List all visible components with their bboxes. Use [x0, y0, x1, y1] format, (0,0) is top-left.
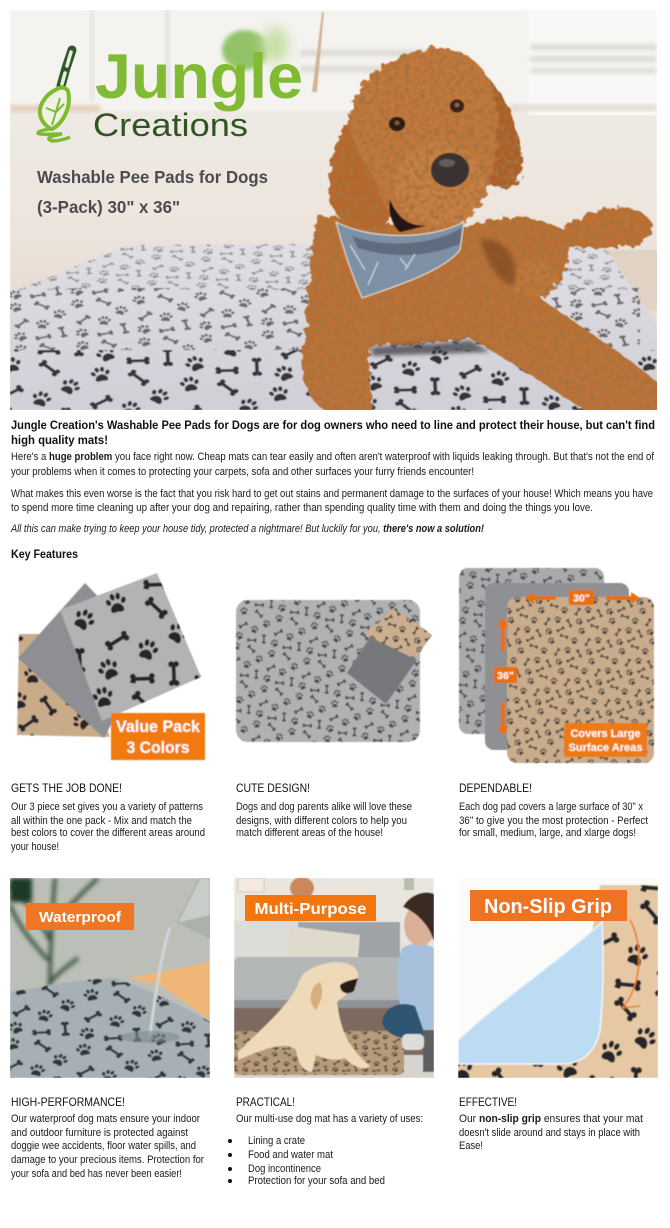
feature text: effective: doesn't slide around and stays in place with: [459, 1127, 640, 1139]
feature text: gets the job done: best colors to cover the different areas around: [11, 827, 205, 839]
orange badge: value pack: 3 Colors: [126, 738, 190, 757]
folded tan mat: [364, 607, 432, 659]
floor: [234, 1007, 424, 1056]
arrow: width: 30": [573, 592, 590, 604]
intro paragraph 2: [11, 488, 653, 514]
sofa seat: [234, 957, 409, 1003]
intro text block: [10, 418, 655, 535]
tan mat with pattern: [458, 885, 658, 1078]
near paw right: [507, 261, 557, 297]
orange label: waterproof: Waterproof: [39, 909, 122, 926]
dog mat: [234, 1031, 404, 1075]
folded gray mat: [347, 637, 417, 704]
tail: [560, 207, 652, 248]
arrow: width: [525, 590, 640, 605]
large gray mat: [236, 600, 420, 742]
hero title line 2: (3-Pack) 30" x 36": [37, 197, 180, 217]
orange label: waterproof: [26, 903, 134, 930]
panel: waterproof image: [10, 878, 210, 1078]
photo background room: [10, 10, 660, 410]
bullet list of uses: Protection for your sofa and bed: [248, 1175, 385, 1187]
head: [349, 48, 498, 232]
feature text: cute design: CUTE DESIGN!: [236, 781, 310, 795]
orange badge: value pack: [111, 713, 205, 760]
panel: non-slip image: [458, 878, 658, 1078]
bullet list of uses: [228, 1135, 385, 1187]
feature text: high-performance: [11, 1095, 204, 1180]
striped cushion: [286, 926, 360, 958]
arrow: height: [494, 617, 517, 736]
feature text: effective: Ease!: [459, 1140, 483, 1152]
feature text: high-performance: your sofa and bed has never been easier!: [11, 1168, 182, 1180]
feature text: gets the job done: Our 3 piece set gives you a variety of patterns: [11, 801, 203, 813]
bullet list of uses: Lining a crate: [248, 1135, 305, 1147]
feature text: effective: Our non-slip grip ensures that your mat: [459, 1113, 643, 1125]
panel: value pack image: [17, 573, 205, 760]
bullet list of uses: Food and water mat: [248, 1149, 333, 1161]
orange badge: covers large surface areas: Covers Large: [570, 728, 640, 740]
face: [389, 100, 469, 232]
back gray mat: [459, 568, 604, 734]
heading: Key Features: Key Features: [11, 547, 78, 561]
feature text: practical: Our multi-use dog mat has a variety of uses:: [236, 1113, 423, 1125]
labrador: [238, 962, 370, 1072]
glass: [178, 878, 210, 938]
tan mat: [17, 634, 110, 737]
orange label: non-slip grip: [470, 890, 627, 921]
feature text: high-performance: HIGH-PERFORMANCE!: [11, 1095, 125, 1109]
wordmark Creations: Creations: [93, 107, 248, 143]
bandana: [336, 222, 464, 298]
feature text: high-performance: damage to your precious items. Protection for: [11, 1154, 204, 1166]
wet mat: [10, 978, 210, 1078]
dark gray mat: [18, 583, 150, 738]
panel: hero photo: [10, 10, 670, 420]
feature text: cute design: designs, with different colors to help you: [236, 815, 407, 827]
wordmark Jungle: Jungle: [95, 42, 303, 112]
intro paragraph 1: [11, 451, 655, 478]
muzzle: [468, 198, 485, 218]
blue non-slip backing: [458, 922, 603, 1064]
feature text: effective: EFFECTIVE!: [459, 1095, 517, 1109]
orange label: multi-purpose: Multi-Purpose: [254, 901, 367, 918]
pee pad mat: [10, 244, 657, 410]
feature text: cute design: [236, 781, 412, 839]
feature text: gets the job done: GETS THE JOB DONE!: [11, 781, 122, 795]
feature text: effective: [459, 1095, 643, 1152]
intro paragraph 3: All this can make trying to keep your house tidy, protected a nightmare! But luckily for you, there's now a solution!: [10, 523, 484, 535]
feature text: dependable: [459, 781, 648, 839]
feature text: gets the job done: all within the one pack - Mix and match the: [11, 815, 192, 827]
feature text: high-performance: and outdoor furniture is protected against: [11, 1127, 188, 1139]
orange badge: covers large surface areas: [564, 723, 647, 757]
icon: bamboo and leaf: [38, 50, 72, 141]
feature text: cute design: match different areas of the house!: [236, 827, 383, 839]
front tan mat: [507, 597, 654, 763]
feature text: high-performance: doggie wee accidents, floor water spills, and: [11, 1140, 196, 1152]
bullet list of uses: Dog incontinence: [248, 1163, 321, 1175]
hero title line 1: Washable Pee Pads for Dogs: [37, 167, 268, 187]
feature text: practical: [228, 1095, 423, 1187]
intro paragraph 1: your problems when it comes to protecting your carpets, sofa and other surfaces your furry friends encounter!: [11, 466, 474, 478]
feature text: cute design: Dogs and dog parents alike will love these: [236, 801, 412, 813]
logo: Jungle Creations: [38, 42, 303, 143]
orange label: non-slip grip: Non-Slip Grip: [484, 896, 612, 918]
light gray patterned mat: [60, 573, 201, 721]
ears: [329, 105, 391, 230]
panel: multi-purpose image: [234, 877, 436, 1078]
panel: dependable image: [459, 568, 654, 763]
orange badge: value pack: Value Pack: [116, 717, 201, 736]
shadow under belly: [372, 340, 490, 356]
orange badge: covers large surface areas: Surface Areas: [568, 742, 642, 754]
feature text: dependable: DEPENDABLE!: [459, 781, 532, 795]
feature text: high-performance: Our waterproof dog mats ensure your indoor: [11, 1113, 200, 1125]
water pour: [150, 928, 170, 1035]
feature text: practical: PRACTICAL!: [236, 1095, 295, 1109]
arrow: height: 36": [497, 670, 514, 682]
orange label: multi-purpose: [245, 895, 376, 921]
intro paragraph 2: to spend more time cleaning up after your dog and repairing, rather than spending quality time with them and doing the things you love.: [11, 502, 593, 514]
feature text: gets the job done: [11, 781, 205, 853]
plant: [10, 878, 98, 985]
dog: [302, 48, 670, 420]
panel: cute design image: [236, 600, 432, 742]
dark gap between body and leg: [480, 239, 516, 285]
feature text: gets the job done: your house!: [11, 841, 59, 853]
middle plain mat: [485, 583, 629, 750]
feature text: dependable: for small, medium, large, and xlarge dogs!: [459, 827, 636, 839]
curved arrow: [622, 920, 640, 1008]
woman: [397, 944, 434, 1040]
sofa back: [298, 922, 400, 958]
body: [302, 215, 670, 420]
orange table: [128, 962, 210, 1020]
intro heading: [11, 418, 655, 447]
intro heading: high quality mats!: [11, 433, 108, 447]
feature text: dependable: 36" to give you the most protection - Perfect: [459, 815, 648, 827]
